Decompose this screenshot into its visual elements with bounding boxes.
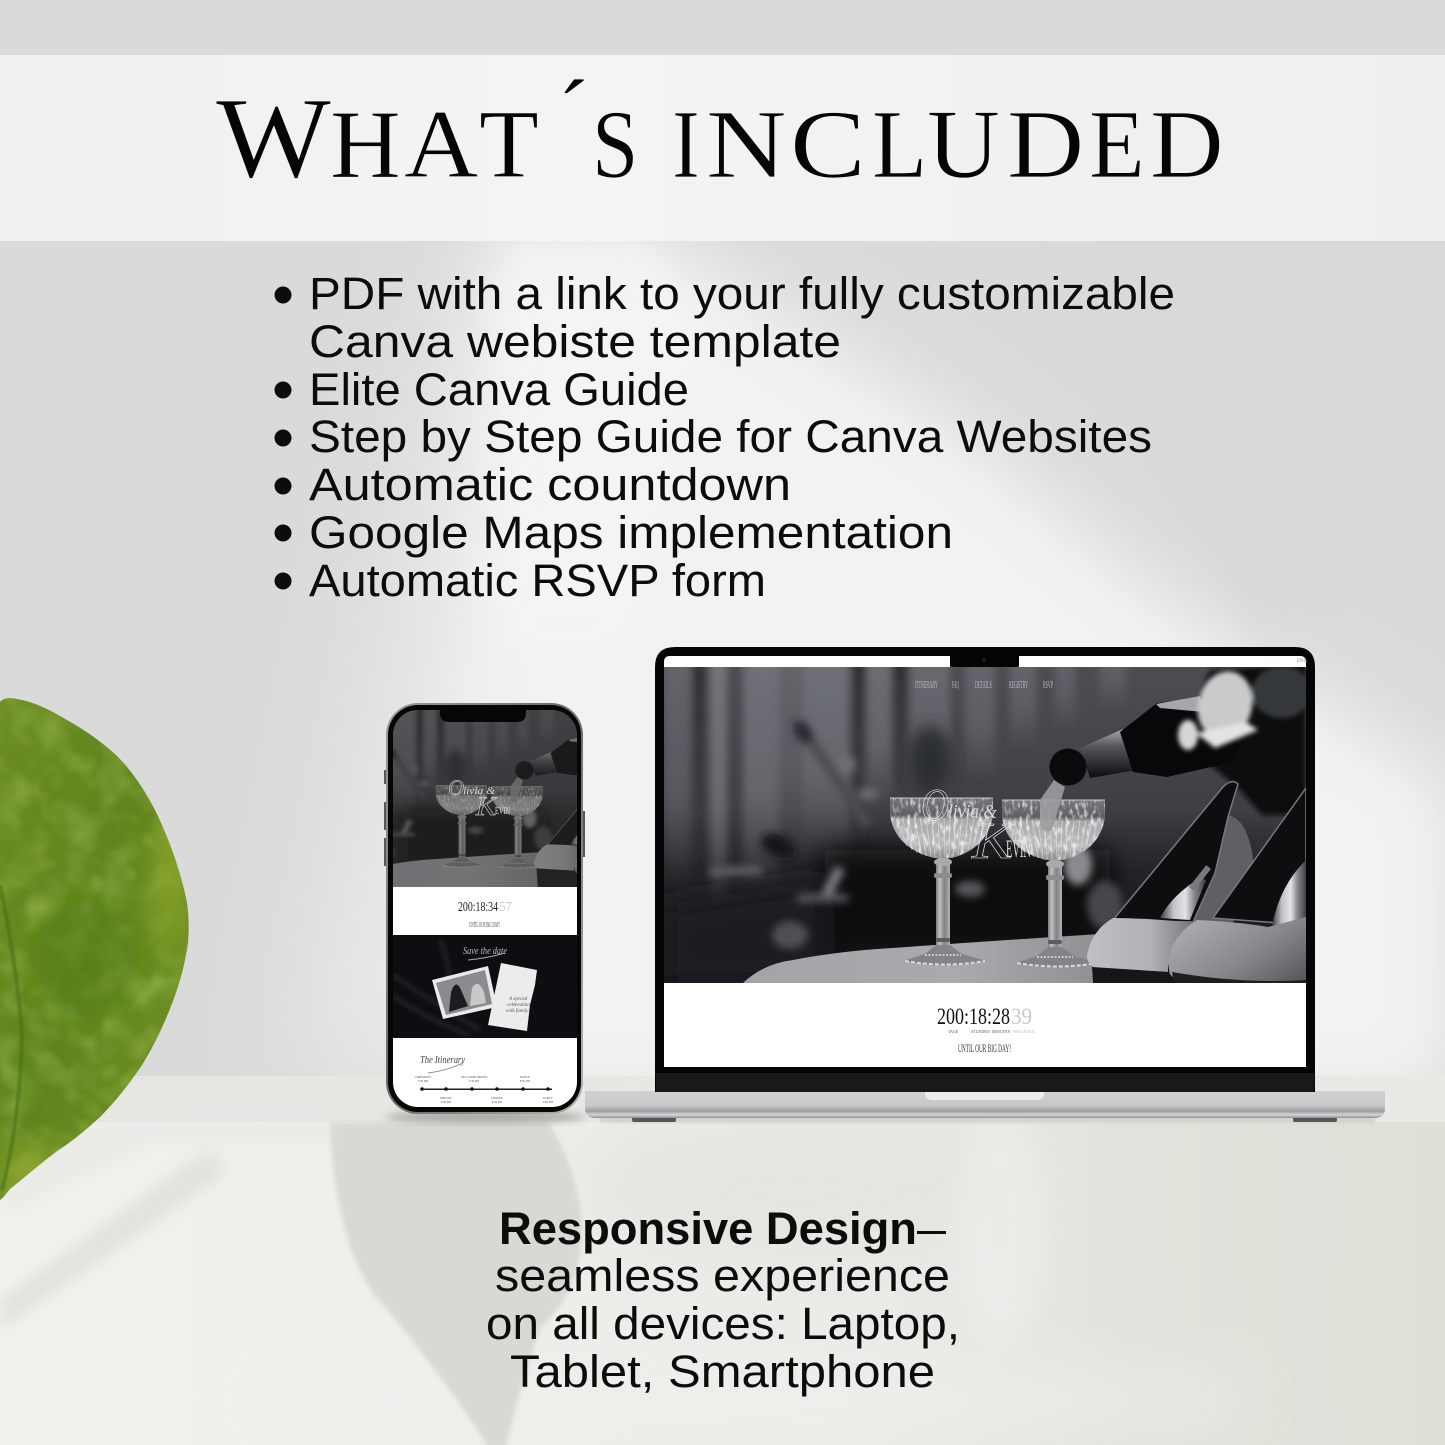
countdown: 39 <box>1011 1004 1032 1029</box>
title <box>216 61 1224 202</box>
phone couple names: O <box>448 775 464 800</box>
laptop mockup: ENG <box>1297 659 1308 664</box>
bullet 1: Canva webiste template <box>309 316 841 367</box>
navigation: REGISTRY <box>1009 679 1028 691</box>
timeline: CEREMONY <box>415 1075 432 1079</box>
hero photo: champagne glasses, bottle and shoes: RSVP <box>1043 679 1053 691</box>
countdown <box>937 1004 1035 1055</box>
invitation card: A special <box>508 997 528 1002</box>
invitation card: celebration <box>507 1003 530 1008</box>
navigation: DETAILS <box>975 679 992 691</box>
title: T <box>479 91 539 199</box>
laptop base <box>585 1091 1385 1118</box>
countdown: STUNDEN <box>971 1029 990 1034</box>
countdown: UNTIL OUR BIG DAY! <box>958 1041 1011 1055</box>
phone screen <box>393 710 577 1107</box>
title: W <box>216 74 332 202</box>
bullet 3: Step by Step Guide for Canva Websites <box>309 411 1152 462</box>
couple names <box>922 790 1030 858</box>
title: N <box>706 89 787 198</box>
timeline: DANCE <box>520 1075 530 1079</box>
timeline: 9:00 PM <box>543 1100 554 1104</box>
bullet 4: Automatic countdown <box>309 459 791 510</box>
title: D <box>1150 90 1224 199</box>
title: ´ <box>557 61 590 169</box>
couple names: livia & <box>948 801 997 823</box>
navigation <box>915 681 1053 690</box>
phone mockup <box>384 703 585 1114</box>
phone save the date panel <box>392 935 577 1038</box>
phone countdown panel: 57 <box>499 900 512 915</box>
couple names: K <box>971 813 1015 870</box>
bullet list <box>274 268 1175 606</box>
title: D <box>1007 91 1084 199</box>
title: C <box>790 89 866 198</box>
caption: responsive design: seamless experience <box>495 1250 950 1301</box>
title: L <box>872 91 927 199</box>
timeline: 5:30 PM <box>469 1079 480 1083</box>
bullet 1: PDF with a link to your fully customizable <box>309 268 1175 319</box>
title: H <box>330 91 401 199</box>
timeline: PARTY <box>543 1096 554 1100</box>
bullet 1 <box>274 268 1175 367</box>
phone countdown panel: 200:18:34 <box>458 900 498 915</box>
background wall <box>0 0 1445 1125</box>
phone couple names <box>448 780 510 816</box>
timeline: PHOTOS <box>440 1096 452 1100</box>
trackpad notch <box>925 1091 1044 1100</box>
phone itinerary panel <box>392 1038 577 1108</box>
phone hero photo <box>393 710 577 887</box>
title: A <box>404 89 478 198</box>
bullet 2: Elite Canva Guide <box>309 364 689 415</box>
navigation: ITINERARY <box>915 679 938 691</box>
phone couple names: livia & <box>463 785 495 797</box>
caption: responsive design: Tablet, Smartphone <box>510 1346 935 1397</box>
bullet 6: Automatic RSVP form <box>309 555 766 606</box>
title band <box>0 55 1445 241</box>
laptop mockup <box>585 640 1385 1122</box>
phone countdown panel <box>392 887 577 935</box>
phone countdown panel: UNTIL OUR BIG DAY! <box>469 921 500 929</box>
countdown panel <box>664 983 1306 1067</box>
couple names: O <box>921 779 949 830</box>
title: S <box>592 90 638 199</box>
laptop feet <box>632 1117 1337 1122</box>
photo card <box>432 966 497 1019</box>
phone body <box>386 703 583 1114</box>
timeline: WELCOME DRINKS <box>460 1075 488 1079</box>
phone couple names: EVIN <box>495 805 510 817</box>
invitation card: with family <box>506 1009 529 1014</box>
icon: green leaf <box>0 690 195 1205</box>
bullet 5: Google Maps implementation <box>309 507 953 558</box>
countdown: 200:18:28 <box>937 1004 1010 1029</box>
browser top strip <box>664 656 1306 667</box>
caption: responsive design <box>486 1203 960 1397</box>
countdown: SEKUNDEN <box>1013 1029 1035 1034</box>
caption: responsive design: – <box>917 1203 946 1254</box>
title: U <box>927 89 1000 199</box>
timeline: 6:00 PM <box>441 1100 452 1104</box>
timeline: 5:00 PM <box>418 1079 429 1083</box>
phone shadow <box>385 1111 585 1123</box>
hero photo: champagne glasses, bottle and shoes: EVIN <box>1006 836 1031 863</box>
caption: responsive design: on all devices: Laptop, <box>486 1298 960 1349</box>
shelf <box>0 1076 1445 1445</box>
timeline <box>415 1075 554 1104</box>
timeline: 6:30 PM <box>492 1100 503 1104</box>
countdown: TAGE <box>948 1029 959 1034</box>
phone couple names: K <box>475 792 498 821</box>
timeline: DINNER <box>491 1096 503 1100</box>
leaf shadow on shelf <box>0 1122 582 1445</box>
phone itinerary panel: The Itinerary <box>420 1055 465 1066</box>
phone save the date panel: Save the date <box>463 946 507 957</box>
timeline: 8:00 PM <box>520 1079 531 1083</box>
hero photo: champagne glasses, bottle and shoes <box>664 667 1306 983</box>
title: I <box>672 90 700 199</box>
camera notch <box>440 709 526 722</box>
phone buttons <box>384 770 585 866</box>
laptop lid <box>655 647 1315 1092</box>
laptop shadow <box>600 1116 1375 1123</box>
title: E <box>1089 91 1145 199</box>
invitation card <box>488 963 537 1031</box>
camera notch <box>950 655 1019 668</box>
navigation: FAQ <box>952 679 959 691</box>
caption: responsive design: Responsive Design <box>499 1203 917 1254</box>
countdown: MINUTEN <box>992 1029 1011 1034</box>
